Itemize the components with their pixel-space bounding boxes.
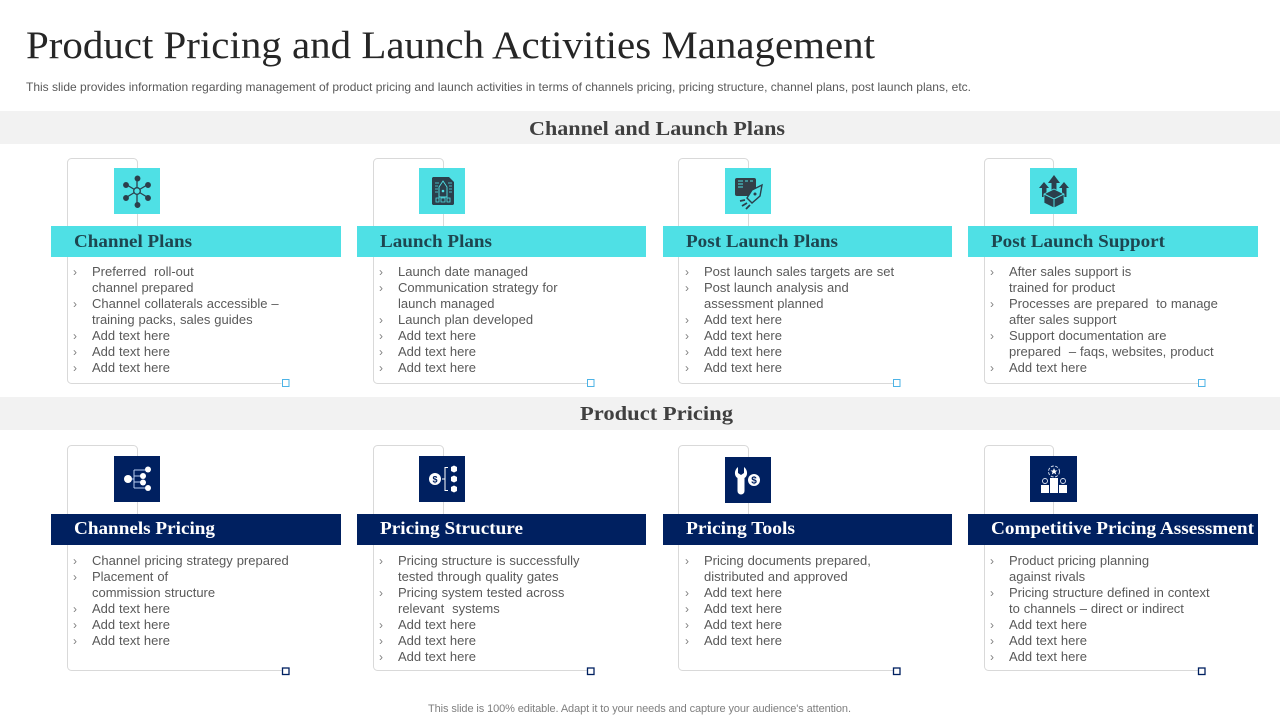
bullet list: Product pricing planning <box>1009 553 1149 568</box>
bullet list: Pricing documents prepared, <box>704 553 871 568</box>
bullet list: › <box>73 361 77 375</box>
bullet list: › <box>379 361 383 375</box>
bullet list: › <box>685 361 689 375</box>
bullet list: Preferred roll-out <box>92 264 194 279</box>
bullet list: › <box>73 265 77 279</box>
bullet list: › <box>990 554 994 568</box>
bullet list: › <box>685 281 689 295</box>
bullet list: › <box>685 265 689 279</box>
bullet list: Channel pricing strategy prepared <box>92 553 289 568</box>
panel: Channels Pricing <box>51 446 341 674</box>
bullet list: › <box>990 265 994 279</box>
bullet list: › <box>379 345 383 359</box>
bullet list: Add text here <box>398 649 476 664</box>
bullet list: Launch plan developed <box>398 312 533 327</box>
bullet list: › <box>73 297 77 311</box>
bullet list: Add text here <box>92 617 170 632</box>
bullet list: › <box>990 634 994 648</box>
bullet list: Add text here <box>1009 633 1087 648</box>
heading bar: Launch Plans <box>380 231 492 251</box>
bullet list: Support documentation are <box>1009 328 1166 343</box>
title: Product Pricing and Launch Activities Management <box>26 24 875 67</box>
bullet list: › <box>990 329 994 343</box>
bullet list <box>685 264 894 375</box>
bullet list: Add text here <box>704 360 782 375</box>
heading bar: Pricing Structure <box>380 518 523 538</box>
heading bar <box>51 514 341 545</box>
icon: wrench and dollar <box>725 457 771 503</box>
icon: launch document <box>419 168 465 214</box>
bullet list: › <box>73 602 77 616</box>
bullet list: › <box>379 634 383 648</box>
bullet list: to channels – direct or indirect <box>1009 601 1184 616</box>
footer note: This slide is 100% editable. Adapt it to your needs and capture your audience's attention. <box>428 703 851 715</box>
bullet list: Add text here <box>92 601 170 616</box>
heading bar: Post Launch Support <box>991 231 1165 251</box>
subtitle description: This slide provides information regarding management of product pricing and launch activities in terms of channels pricing, pricing structure, channel plans, post launch plans, etc. <box>26 80 971 94</box>
heading bar <box>357 226 646 257</box>
icon: network hub <box>114 168 160 214</box>
heading bar: Channel Plans <box>74 231 192 251</box>
bullet list: Add text here <box>92 633 170 648</box>
bullet list: Add text here <box>1009 360 1087 375</box>
panel: Post Launch Support <box>968 158 1258 386</box>
bullet list <box>379 553 580 664</box>
bullet list: channel prepared <box>92 280 194 295</box>
section band: Product Pricing: Product Pricing <box>580 403 733 425</box>
bullet list: › <box>379 650 383 664</box>
bullet list: › <box>685 329 689 343</box>
heading bar <box>968 514 1258 545</box>
icon: box with arrows <box>1030 168 1077 214</box>
bullet list: Add text here <box>1009 649 1087 664</box>
bullet list: Communication strategy for <box>398 280 558 295</box>
bullet list: › <box>379 618 383 632</box>
bullet list: After sales support is <box>1009 264 1132 279</box>
bullet list: › <box>685 554 689 568</box>
bullet list: › <box>379 329 383 343</box>
bullet list: Pricing system tested across <box>398 585 565 600</box>
bullet list: Pricing structure defined in context <box>1009 585 1210 600</box>
panel: Channel Plans <box>51 158 341 386</box>
icon: podium with star <box>1030 456 1077 502</box>
bullet list: › <box>73 570 77 584</box>
bullet list: Pricing structure is successfully <box>398 553 580 568</box>
bullet list: Add text here <box>398 633 476 648</box>
bullet list <box>73 264 279 375</box>
bullet list: against rivals <box>1009 569 1086 584</box>
bullet list: › <box>990 361 994 375</box>
bullet list: › <box>379 265 383 279</box>
section band: Channel and Launch Plans: Channel and Launch Plans <box>529 118 785 140</box>
bullet list: › <box>685 618 689 632</box>
bullet list: Add text here <box>704 585 782 600</box>
heading bar: Competitive Pricing Assessment <box>991 518 1254 538</box>
bullet list: Add text here <box>704 344 782 359</box>
bullet list: › <box>379 586 383 600</box>
bullet list: › <box>990 618 994 632</box>
bullet list <box>990 264 1218 375</box>
bullet list: › <box>73 618 77 632</box>
bullet list: Add text here <box>398 328 476 343</box>
bullet list: › <box>379 281 383 295</box>
bullet list: Add text here <box>92 344 170 359</box>
bullet list: › <box>685 586 689 600</box>
bullet list: › <box>685 313 689 327</box>
bullet list: Channel collaterals accessible – <box>92 296 279 311</box>
bullet list: Add text here <box>704 328 782 343</box>
bullet list: trained for product <box>1009 280 1115 295</box>
bullet list: distributed and approved <box>704 569 848 584</box>
bullet list: tested through quality gates <box>398 569 559 584</box>
bullet list <box>379 264 558 375</box>
bullet list: assessment planned <box>704 296 824 311</box>
bullet list <box>73 553 289 648</box>
bullet list <box>990 553 1210 664</box>
panel: Pricing Structure <box>357 446 646 674</box>
heading bar <box>51 226 341 257</box>
heading bar: Post Launch Plans <box>686 231 838 251</box>
heading bar <box>968 226 1258 257</box>
icon: branching tree <box>114 456 160 502</box>
bullet list: › <box>990 297 994 311</box>
heading bar <box>663 226 952 257</box>
panel: Launch Plans <box>357 158 646 386</box>
bullet list: after sales support <box>1009 312 1117 327</box>
bullet list: Add text here <box>704 633 782 648</box>
bullet list: relevant systems <box>398 601 500 616</box>
bullet list: › <box>990 586 994 600</box>
bullet list: launch managed <box>398 296 494 311</box>
bullet list: Add text here <box>1009 617 1087 632</box>
bullet list: › <box>73 345 77 359</box>
bullet list: › <box>73 554 77 568</box>
bullet list: › <box>73 329 77 343</box>
heading bar <box>357 514 646 545</box>
bullet list: Add text here <box>398 344 476 359</box>
heading bar: Pricing Tools <box>686 518 795 538</box>
heading bar: Channels Pricing <box>74 518 215 538</box>
bullet list: › <box>379 554 383 568</box>
bullet list: training packs, sales guides <box>92 312 253 327</box>
bullet list: Post launch analysis and <box>704 280 849 295</box>
panel: Post Launch Plans <box>663 158 952 386</box>
bullet list: › <box>379 313 383 327</box>
bullet list: › <box>685 634 689 648</box>
icon: dollar with boxes <box>419 456 465 502</box>
section band: Channel and Launch Plans <box>0 111 1280 144</box>
icon: dollar with boxes: $ <box>432 474 438 484</box>
bullet list: Add text here <box>398 617 476 632</box>
panel: Pricing Tools <box>663 446 952 674</box>
bullet list: Add text here <box>704 617 782 632</box>
bullet list: › <box>685 602 689 616</box>
bullet list: commission structure <box>92 585 215 600</box>
bullet list: prepared – faqs, websites, product <box>1009 344 1214 359</box>
bullet list: › <box>990 650 994 664</box>
bullet list: Add text here <box>92 328 170 343</box>
bullet list: Processes are prepared to manage <box>1009 296 1218 311</box>
bullet list: › <box>685 345 689 359</box>
icon: rocket and board <box>725 168 771 214</box>
bullet list: Add text here <box>398 360 476 375</box>
bullet list: Placement of <box>92 569 169 584</box>
bullet list: Add text here <box>704 601 782 616</box>
bullet list: Add text here <box>92 360 170 375</box>
heading bar <box>663 514 952 545</box>
bullet list: Post launch sales targets are set <box>704 264 894 279</box>
icon: wrench and dollar: $ <box>751 476 757 486</box>
bullet list: Launch date managed <box>398 264 528 279</box>
bullet list: › <box>73 634 77 648</box>
bullet list <box>685 553 871 648</box>
section band: Product Pricing <box>0 397 1280 430</box>
bullet list: Add text here <box>704 312 782 327</box>
panel: Competitive Pricing Assessment <box>968 446 1258 674</box>
